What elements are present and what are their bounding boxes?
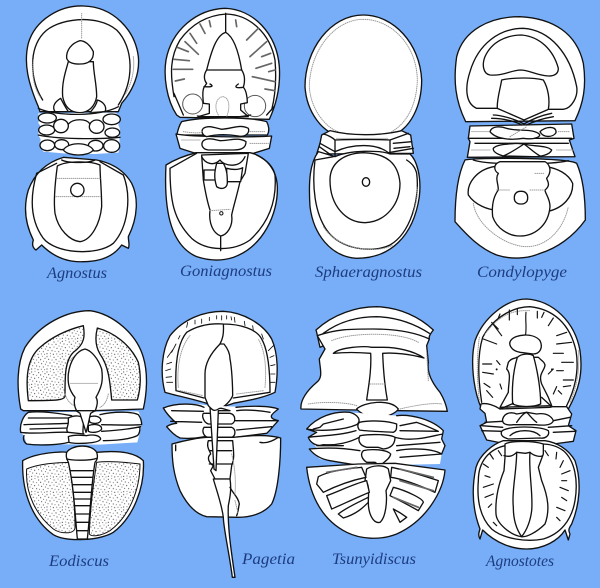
trilobite: Goniagnostus [165, 8, 280, 260]
trilobite: Agnostotes [473, 299, 581, 549]
label: Agnostus: Agnostus [46, 265, 107, 282]
label: Agnostotes: Agnostotes [485, 553, 554, 570]
label: Condylopyge: Condylopyge [477, 264, 567, 281]
trilobite: Condylopyge [455, 17, 585, 258]
trilobite: Tsunyidiscus [301, 307, 447, 538]
trilobite: Agnostus [26, 6, 139, 262]
trilobite: Sphaeragnostus [305, 15, 422, 258]
label: Goniagnostus: Goniagnostus [180, 263, 272, 280]
trilobite: Pagetia [162, 311, 281, 577]
label: Tsunyidiscus: Tsunyidiscus [332, 551, 416, 568]
trilobite: Eodiscus [18, 311, 146, 540]
label: Sphaeragnostus: Sphaeragnostus [315, 264, 422, 281]
label: Pagetia: Pagetia [241, 551, 295, 568]
label: Eodiscus: Eodiscus [48, 553, 109, 570]
